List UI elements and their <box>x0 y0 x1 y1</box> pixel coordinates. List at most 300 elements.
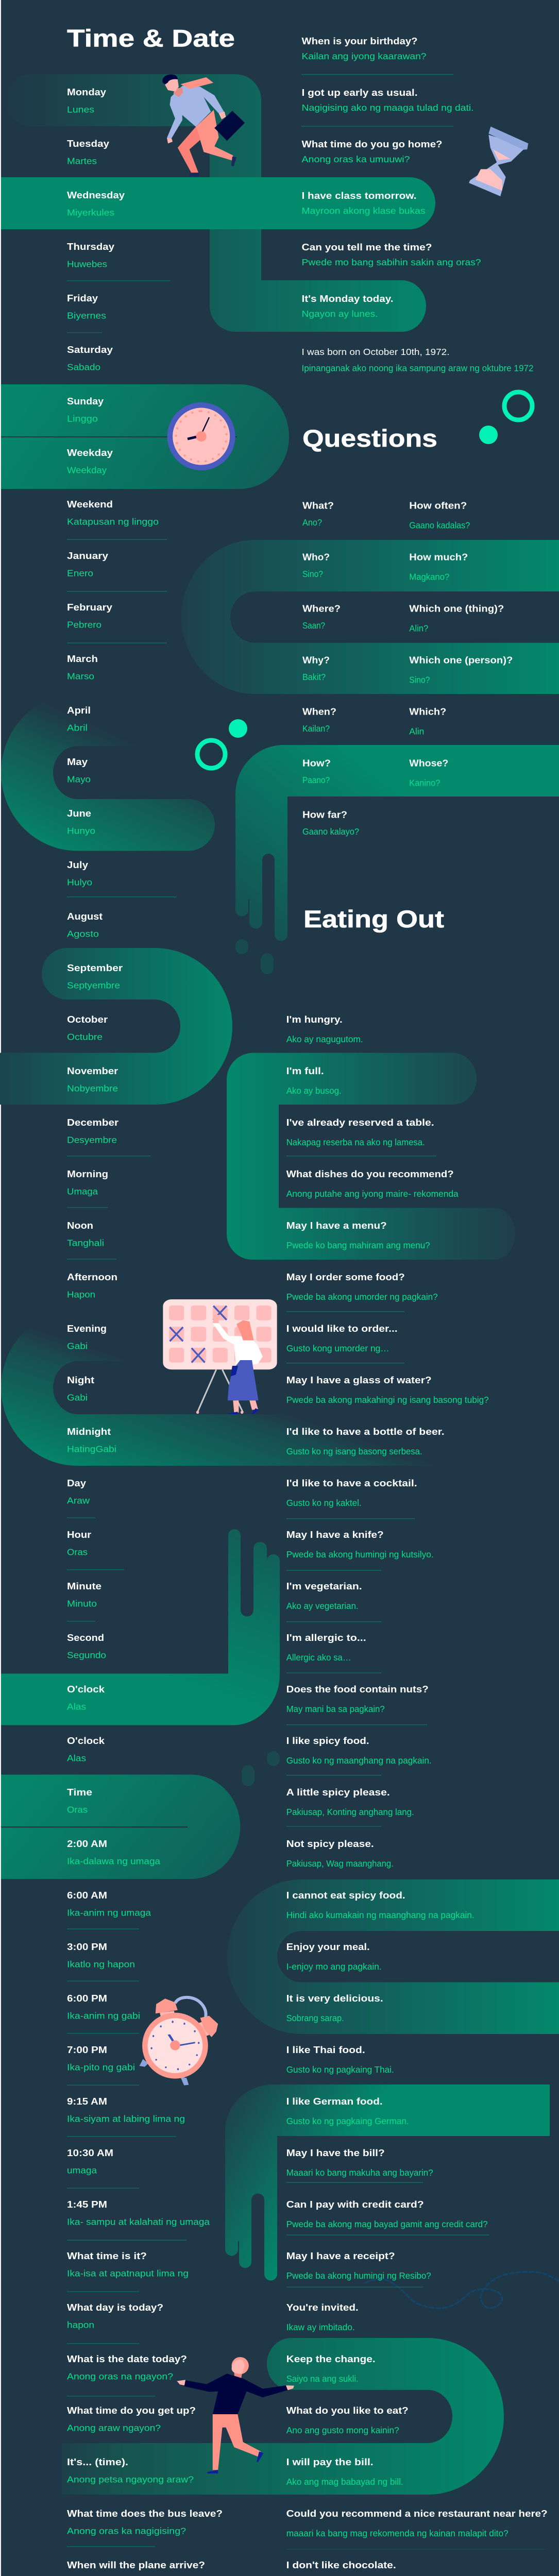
question: Which one thing: Alin? <box>409 623 429 634</box>
sentence: class tomorrow: I have class tomorrow. <box>302 191 416 201</box>
row: Weekend: Weekend <box>67 499 113 510</box>
band: September October November <box>0 948 232 1105</box>
question: How <box>302 758 331 785</box>
sentence: birthday: Kailan ang iyong kaarawan? <box>302 51 427 61</box>
row: O'clock: Alas <box>67 1701 86 1711</box>
phrase: vegetarian: Ako ay vegetarian. <box>286 1601 359 1611</box>
illustration: wall clock <box>167 402 235 470</box>
question: Why <box>302 655 330 682</box>
row: O'clock: O'clock <box>67 1684 105 1694</box>
row: March: March <box>67 654 98 664</box>
row: 7:00 PM: Ika-pito ng gabi <box>67 2062 135 2072</box>
row: 6:00 AM: Ika-anim ng umaga <box>67 1907 151 1918</box>
sentence: got up early <box>302 88 474 113</box>
question: How far: How far? <box>302 810 347 820</box>
row: Saturday <box>67 345 113 372</box>
phrase: recommend restaurant <box>286 2509 548 2538</box>
row: April <box>67 705 91 733</box>
drip: right <box>267 1751 280 1766</box>
row: What day is today?: hapon <box>67 2319 94 2330</box>
phrase: not spicy: Pakiusap, Wag maanghang. <box>286 1858 394 1869</box>
row: Sunday: Sunday <box>67 396 104 406</box>
decorative ring middle <box>197 740 225 768</box>
row: Sunday <box>67 396 104 423</box>
row: May: May <box>67 757 88 767</box>
row: July: July <box>67 860 88 870</box>
question: Where <box>302 604 341 631</box>
row: Friday: Friday <box>67 293 98 303</box>
question: How: Paano? <box>302 775 330 785</box>
row: Sunday: Linggo <box>67 413 98 423</box>
phrase: allergic: Allergic ako sa… <box>286 1652 351 1663</box>
row: November: November <box>67 1066 118 1076</box>
row: O'clock <box>67 1684 105 1711</box>
question: Who: Sino? <box>302 569 323 579</box>
sentence: birthday: When is your birthday? <box>302 36 417 46</box>
row: Second: Segundo <box>67 1650 106 1660</box>
phrase: cannot eat spicy: I cannot eat spicy food. <box>286 1890 405 1901</box>
phrase: like to eat: What do you like to eat? <box>286 2405 409 2416</box>
phrase: German food: Gusto ko ng pagkaing German. <box>286 2116 409 2126</box>
row: Morning: Umaga <box>67 1186 98 1196</box>
row: Afternoon: Afternoon <box>67 1272 117 1282</box>
phrase: keep the change <box>286 2354 376 2384</box>
band: Keep the change loop <box>62 2338 504 2495</box>
phrase: allergic <box>286 1633 366 1663</box>
question: Why: Why? <box>302 655 330 666</box>
row: 6:00 AM: 6:00 AM <box>67 1890 107 1901</box>
row: Morning: Morning <box>67 1169 108 1179</box>
row: Midnight: Midnight <box>67 1427 111 1437</box>
row: January: Enero <box>67 568 93 578</box>
row: Hour: Oras <box>67 1547 88 1557</box>
row: February <box>67 602 112 630</box>
row: March: Marso <box>67 671 94 681</box>
row: November: Nobyembre <box>67 1083 118 1093</box>
row: 9:15 AM <box>67 2096 185 2124</box>
phrase: spicy food: Gusto ko ng maanghang na pagkain. <box>286 1755 432 1766</box>
row: What time do you get up?: Anong araw ngayon? <box>67 2422 161 2433</box>
phrase: reserved <box>286 1117 434 1147</box>
row: 7:00 PM <box>67 2045 135 2072</box>
row: 2:00 AM: 2:00 AM <box>67 1839 107 1849</box>
decorative dot middle <box>229 719 247 738</box>
dividers <box>301 74 453 75</box>
question: Who <box>302 552 330 579</box>
phrase: little spicy <box>286 1787 414 1817</box>
band: Sunday and Weekday <box>1 384 289 489</box>
row: What day is today?: What day is today? <box>67 2302 163 2313</box>
phrase: order food: May I order some food? <box>286 1272 405 1282</box>
sentence: tell the time: Can you tell me the time? <box>302 242 432 252</box>
phrase: Thai food: I like Thai food. <box>286 2045 365 2055</box>
phrase: German food <box>286 2096 409 2126</box>
band: German food with drips <box>225 2084 550 2280</box>
question: Which <box>409 707 446 737</box>
row: It's... (time).: Anong petsa ngayong araw? <box>67 2474 194 2484</box>
illustration: walking man <box>177 2357 294 2473</box>
phrase: menu <box>286 1221 430 1250</box>
phrase: Thai food: Gusto ko ng pagkaing Thai. <box>286 2064 394 2075</box>
row: Time <box>67 1787 92 1815</box>
phrase: recommend restaurant: maaari ka bang mag rekomenda ng kainan malapit dito? <box>286 2528 509 2538</box>
phrase: receipt <box>286 2251 431 2281</box>
decorative ring top <box>504 392 532 420</box>
band: Evening Night Midnight <box>1 1310 453 1466</box>
phrase: like to eat <box>286 2405 409 2435</box>
phrase: would like to order <box>286 1324 398 1353</box>
phrase: nuts <box>286 1684 429 1714</box>
question: What <box>302 501 334 528</box>
row: What time does the bus leave? <box>67 2509 223 2536</box>
band: I cannot eat and delicious <box>227 1879 559 2034</box>
question: Which one thing: Which one (thing)? <box>409 604 504 614</box>
sentence: Monday today: Ngayon ay lunes. <box>302 309 378 319</box>
phrase: water: May I have a glass of water? <box>286 1375 432 1385</box>
row: April: Abril <box>67 722 88 733</box>
row: November <box>67 1066 118 1093</box>
row: What is the date today?: What is the date today? <box>67 2354 187 2364</box>
row: October: Octubre <box>67 1031 103 1042</box>
row: 1:45 PM: 1:45 PM <box>67 2199 107 2210</box>
row: August <box>67 911 103 939</box>
question: When: Kailan? <box>302 723 330 734</box>
row: 3:00 PM: 3:00 PM <box>67 1942 107 1952</box>
phrase: receipt: May I have a receipt? <box>286 2251 395 2261</box>
question: Whose: Whose? <box>409 758 448 769</box>
illustration: man with briefcase <box>162 74 245 177</box>
row: Wednesday: Miyerkules <box>67 207 114 217</box>
row: December: Desyembre <box>67 1134 117 1145</box>
heading: Time & Date: Time & Date <box>67 25 235 52</box>
phrase: like to eat: Ano ang gusto mong kainin? <box>286 2425 399 2435</box>
phrase: chocolate: I don't like chocolate. <box>286 2560 396 2570</box>
question: Which one person <box>409 655 513 685</box>
row: O'clock second <box>67 1736 105 1763</box>
row: August: August <box>67 911 103 922</box>
phrase: recommend dishes <box>286 1169 459 1199</box>
row: Day: Day <box>67 1478 86 1488</box>
phrase: nuts: Does the food contain nuts? <box>286 1684 429 1694</box>
row: Time: Oras <box>67 1804 88 1815</box>
row: August: Agosto <box>67 928 99 939</box>
row: What time is it? <box>67 2251 189 2278</box>
row: What time is it?: Ika-isa at apatnaput lima ng <box>67 2268 189 2278</box>
question: When: When? <box>302 707 336 717</box>
row: 6:00 PM: Ika-anim ng gabi <box>67 2010 140 2021</box>
row: Morning <box>67 1169 108 1196</box>
row: Monday <box>67 87 106 114</box>
row: Noon: Noon <box>67 1221 93 1231</box>
row: What time is it?: What time is it? <box>67 2251 147 2261</box>
sentence: go home: Anong oras ka umuuwi? <box>302 154 410 164</box>
row: Night <box>67 1375 94 1402</box>
sentence: tell the time <box>302 242 481 267</box>
question: Which: Which? <box>409 707 446 717</box>
row: June: Hunyo <box>67 825 95 836</box>
row: It's... (time).: It's... (time). <box>67 2457 128 2467</box>
row: Saturday: Sabado <box>67 362 100 372</box>
phrase: little spicy: Pakiusap, Konting anghang lang. <box>286 1807 414 1817</box>
phrase: cocktail: Gusto ko ng kaktel. <box>286 1498 362 1508</box>
phrase: allergic: I'm allergic to... <box>286 1633 366 1643</box>
row: It's... (time). <box>67 2457 194 2484</box>
heading: Eating Out: Eating Out <box>303 905 444 933</box>
phrase: not spicy: Not spicy please. <box>286 1839 374 1849</box>
row: What is the date today? <box>67 2354 187 2381</box>
row: O'clock second: O'clock <box>67 1736 105 1746</box>
row: September <box>67 963 123 990</box>
row: What is the date today?: Anong oras na ngayon? <box>67 2371 173 2381</box>
phrase: delicious: It is very delicious. <box>286 1993 383 2004</box>
sentence: born on October: I was born on October 10th, 1972. <box>302 347 449 357</box>
row: Noon <box>67 1221 104 1248</box>
phrase: enjoy meal: I-enjoy mo ang pagkain. <box>286 1961 382 1972</box>
phrase: pay the bill: I will pay the bill. <box>286 2457 374 2467</box>
phrase: reserved: I've already reserved a table. <box>286 1117 434 1128</box>
left edge strip <box>0 0 1 2576</box>
phrase: vegetarian <box>286 1581 362 1611</box>
row: 9:15 AM: Ika-siyam at labing lima ng <box>67 2113 185 2124</box>
illustration: alarm clock <box>140 1997 218 2086</box>
question: How much <box>409 552 468 582</box>
row: Friday: Biyernes <box>67 310 106 320</box>
decorative dot top <box>479 426 498 444</box>
sentence: go home: What time do you go home? <box>302 139 442 149</box>
row: 1:45 PM: Ika- sampu at kalahati ng umaga <box>67 2216 210 2227</box>
phrase: would like to order: I would like to order... <box>286 1324 398 1334</box>
phrase: bill <box>286 2148 433 2178</box>
question: How far: Gaano kalayo? <box>302 826 359 837</box>
row: Midnight <box>67 1427 116 1454</box>
phrase: cocktail <box>286 1478 417 1508</box>
row: Second: Second <box>67 1633 104 1643</box>
row: July: Hulyo <box>67 877 92 887</box>
row: Night: Gabi <box>67 1392 88 1402</box>
phrase: order food <box>286 1272 438 1302</box>
row: Tuesday: Tuesday <box>67 139 109 149</box>
row: O'clock second: Alas <box>67 1753 86 1763</box>
row: Friday <box>67 293 106 320</box>
illustration: hourglass <box>469 127 528 196</box>
row: February: February <box>67 602 112 613</box>
drip: right <box>261 953 274 974</box>
question: How often <box>409 501 470 531</box>
row: July <box>67 860 92 887</box>
right column: time and date sentences <box>302 36 534 373</box>
question: Which one person: Which one (person)? <box>409 655 513 666</box>
phrase: knife <box>286 1530 434 1560</box>
row: Afternoon: Hapon <box>67 1289 95 1299</box>
question: How often: How often? <box>409 501 467 511</box>
row: Day <box>67 1478 90 1505</box>
phrase: beer: I'd like to have a bottle of beer. <box>286 1427 445 1437</box>
row: Wednesday <box>67 190 125 217</box>
row: 10:30 AM: umaga <box>67 2165 97 2175</box>
phrase: credit card: Can I pay with credit card? <box>286 2199 424 2210</box>
row: 6:00 PM: 6:00 PM <box>67 1993 107 2004</box>
row: 10:30 AM <box>67 2148 113 2175</box>
band: How with drips <box>235 745 559 941</box>
row: Afternoon <box>67 1272 117 1299</box>
row: Weekend: Katapusan ng linggo <box>67 516 159 527</box>
row: What time does the bus leave?: What time does the bus leave? <box>67 2509 223 2519</box>
question: How much: How much? <box>409 552 468 563</box>
row: Thursday: Thursday <box>67 242 114 252</box>
row: What time does the bus leave?: Anong oras ka nagigising? <box>67 2526 186 2536</box>
phrase: menu: May I have a menu? <box>286 1221 387 1231</box>
question: Which one person: Sino? <box>409 675 430 685</box>
question: Which one thing <box>409 604 504 634</box>
phrase: spicy food: I like spicy food. <box>286 1736 369 1746</box>
phrase: keep the change: Keep the change. <box>286 2354 376 2364</box>
phrase: enjoy meal <box>286 1942 382 1972</box>
phrase: credit card <box>286 2199 488 2229</box>
row: Weekday: Weekday <box>67 448 113 458</box>
phrase: invited: You're invited. <box>286 2302 359 2313</box>
row: 3:00 PM: Ikatlo ng hapon <box>67 1959 135 1969</box>
row: What day is today? <box>67 2302 163 2330</box>
illustration: calendar and woman <box>163 1299 277 1414</box>
row: September: Septyembre <box>67 980 120 990</box>
row: Tuesday <box>67 139 109 166</box>
row: What time do you get up?: What time do you get up? <box>67 2405 196 2416</box>
phrase: cocktail: I'd like to have a cocktail. <box>286 1478 417 1488</box>
phrase: full: Ako ay busog. <box>286 1086 342 1096</box>
dashed flight path <box>365 2272 558 2308</box>
row: Hour <box>67 1530 91 1557</box>
phrase: little spicy: A little spicy please. <box>286 1787 390 1798</box>
sentence: born on October <box>302 347 534 373</box>
band: Wednesday <box>1 177 435 229</box>
row: December <box>67 1117 118 1145</box>
question: Which: Alin <box>409 726 424 737</box>
row: 6:00 AM <box>67 1890 151 1918</box>
question: How often: Gaano kadalas? <box>409 520 470 531</box>
phrase: enjoy meal: Enjoy your meal. <box>286 1942 370 1952</box>
row: December: December <box>67 1117 118 1128</box>
row: Minute <box>67 1581 101 1608</box>
phrase: bill: May I have the bill? <box>286 2148 385 2158</box>
question: What: What? <box>302 501 334 511</box>
phrase: vegetarian: I'm vegetarian. <box>286 1581 362 1591</box>
row: Noon: Tanghali <box>67 1238 104 1248</box>
row: February: Pebrero <box>67 619 101 630</box>
phrase: nuts: May mani ba sa pagkain? <box>286 1704 385 1714</box>
band: April May June <box>1 694 215 851</box>
row: Minute: Minute <box>67 1581 101 1591</box>
row: Weekday <box>67 448 113 475</box>
row: Evening: Evening <box>67 1324 107 1334</box>
phrase: would like to order: Gusto kong umorder ng… <box>286 1343 389 1353</box>
question: Where: Saan? <box>302 620 325 631</box>
phrase: beer <box>286 1427 445 1456</box>
band: Monday to It's Monday <box>5 74 426 332</box>
question: How much: Magkano? <box>409 572 450 582</box>
row: Thursday: Huwebes <box>67 259 107 269</box>
questions grid <box>302 501 513 837</box>
phrase: pay the bill: Ako ang mag babayad ng bill. <box>286 2477 403 2487</box>
phrase: cannot eat spicy: Hindi ako kumakain ng maanghang na pagkain. <box>286 1910 475 1920</box>
phrase: receipt: Pwede ba akong humingi ng Resibo? <box>286 2270 431 2281</box>
phrase: not spicy <box>286 1839 394 1869</box>
phrase: recommend dishes: Anong putahe ang iyong maire- rekomenda <box>286 1189 459 1199</box>
row: Hour: Hour <box>67 1530 91 1540</box>
row: 9:15 AM: 9:15 AM <box>67 2096 107 2107</box>
row: April: April <box>67 705 91 716</box>
question: Who: Who? <box>302 552 330 563</box>
drip: left <box>235 939 248 954</box>
row: Minute: Minuto <box>67 1598 97 1608</box>
left column: vocabulary list <box>67 87 223 2576</box>
phrase: hungry <box>286 1014 363 1044</box>
row: 10:30 AM: 10:30 AM <box>67 2148 113 2158</box>
phrase: spicy food <box>286 1736 432 1766</box>
phrase: credit card: Pwede ba akong mag bayad gamit ang credit card? <box>286 2219 488 2229</box>
band: Questions who and where <box>181 540 559 694</box>
band: Time and 2:00 AM <box>1 1774 240 1879</box>
phrase: pay the bill <box>286 2457 403 2487</box>
row: Monday: Lunes <box>67 104 94 114</box>
sentence: got up early: Nagigising ako ng maaga tulad ng dati. <box>302 103 474 113</box>
sentence: class tomorrow: Mayroon akong klase bukas <box>302 206 426 216</box>
phrase: full <box>286 1066 342 1096</box>
phrase: water: Pwede ba akong makahingi ng isang basong tubig? <box>286 1395 489 1405</box>
row: Night: Night <box>67 1375 94 1385</box>
row: June: June <box>67 808 91 819</box>
row: Midnight: HatingGabi <box>67 1444 116 1454</box>
row: September: September <box>67 963 123 973</box>
sentence: born on October: Ipinanganak ako noong ika sampung araw ng oktubre 1972 <box>302 363 534 373</box>
phrase: beer: Gusto ko ng isang basong serbesa. <box>286 1446 422 1456</box>
sentence: Monday today: It's Monday today. <box>302 294 394 304</box>
sentence: go home <box>302 139 442 164</box>
phrase: German food: I like German food. <box>286 2096 383 2107</box>
sentence: got up early: I got up early as usual. <box>302 88 417 98</box>
row: When will the plane arrive?: When will the plane arrive? <box>67 2560 205 2570</box>
row: May <box>67 757 91 784</box>
phrase: hungry: Ako ay nagugutom. <box>286 1034 363 1044</box>
phrase: knife: Pwede ba akong humingi ng kutsilyo. <box>286 1549 434 1560</box>
phrase: knife: May I have a knife? <box>286 1530 384 1540</box>
row: Wednesday: Wednesday <box>67 190 125 200</box>
sentence: Monday today <box>302 294 394 319</box>
row: January: January <box>67 551 108 561</box>
phrase: recommend dishes: What dishes do you recommend? <box>286 1169 454 1179</box>
row: June <box>67 808 95 836</box>
row: May: Mayo <box>67 774 91 784</box>
row: 6:00 PM <box>67 1993 140 2021</box>
phrase: hungry: I'm hungry. <box>286 1014 343 1025</box>
row: October: October <box>67 1014 108 1025</box>
phrase: menu: Pwede ko bang mahiram ang menu? <box>286 1240 430 1250</box>
phrase: invited <box>286 2302 359 2332</box>
row: Saturday: Saturday <box>67 345 113 355</box>
phrase: order food: Pwede ba akong umorder ng pagkain? <box>286 1292 438 1302</box>
row: Evening <box>67 1324 107 1351</box>
question: How far <box>302 810 359 837</box>
row: Weekend <box>67 499 159 527</box>
sentence: class tomorrow <box>302 191 426 216</box>
row: Monday: Monday <box>67 87 106 97</box>
phrase: invited: Ikaw ay imbitado. <box>286 2322 355 2332</box>
row: 1:45 PM <box>67 2199 210 2227</box>
question: Whose <box>409 758 448 788</box>
row: Weekday: Weekday <box>67 465 107 475</box>
question: What: Ano? <box>302 517 322 528</box>
eating out sentences <box>286 1014 548 2576</box>
row: Evening: Gabi <box>67 1341 88 1351</box>
